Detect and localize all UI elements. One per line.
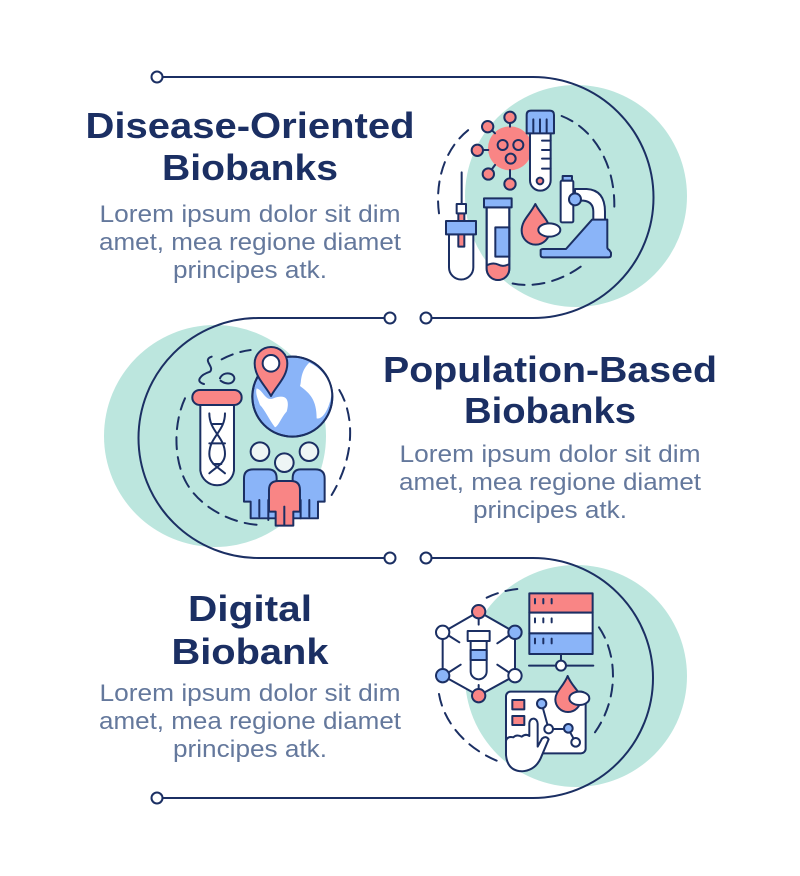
connector bottom dot 2 <box>384 552 396 564</box>
icon: population and genetics <box>192 347 332 526</box>
body text 1: amet, mea regione diamet <box>99 229 401 256</box>
icon: dashed ring 1 <box>438 116 614 285</box>
body text 3: principes atk. <box>173 736 327 763</box>
icon: dashed ring 3 <box>439 589 613 761</box>
icon: server <box>529 593 593 671</box>
icon: location pin <box>255 347 287 396</box>
icon: needle tube <box>446 172 476 279</box>
connector end dot 1 <box>420 312 432 324</box>
body text 2: amet, mea regione diamet <box>399 469 701 496</box>
icon: virus <box>472 112 532 190</box>
heading: disease-oriented biobanks: Biobanks <box>162 147 338 188</box>
connector line 2 <box>138 318 384 558</box>
icon: digital data <box>436 593 593 771</box>
icon: touch card <box>506 676 589 753</box>
panel: digital biobank <box>99 552 687 804</box>
body text 3 <box>99 680 401 763</box>
heading: disease-oriented biobanks <box>86 105 414 188</box>
body text 2 <box>399 441 701 524</box>
heading: digital biobank: Biobank <box>172 631 330 672</box>
icon: microscope <box>541 176 611 257</box>
heading: digital biobank: Digital <box>188 588 312 629</box>
mint circle 3 <box>465 565 687 787</box>
body text 3: Lorem ipsum dolor sit dim <box>100 680 400 707</box>
body text 1: principes atk. <box>173 257 327 284</box>
connector line 1 <box>163 77 654 318</box>
heading: disease-oriented biobanks: Disease-Oriented <box>86 105 414 146</box>
icon: globe <box>252 357 332 437</box>
body text 1 <box>99 201 401 284</box>
body text 2: principes atk. <box>473 497 627 524</box>
icon: test tube <box>527 111 554 191</box>
connector end dot 3 <box>152 792 162 804</box>
connector start dot 3 <box>420 552 432 564</box>
body text 1: Lorem ipsum dolor sit dim <box>100 201 400 228</box>
body text 3: amet, mea regione diamet <box>99 708 401 735</box>
connector line 3 <box>163 558 653 798</box>
icon: laboratory samples <box>446 111 611 280</box>
body text 2: Lorem ipsum dolor sit dim <box>400 441 700 468</box>
icon: blood drop <box>522 204 560 245</box>
heading: digital biobank <box>172 588 330 672</box>
panel: population-based biobanks <box>104 312 717 564</box>
icon: blood vial <box>484 198 512 280</box>
icon: dna test tube <box>192 357 242 485</box>
panel: disease-oriented biobanks <box>86 72 687 324</box>
connector top dot 2 <box>384 312 396 324</box>
icon: hexagon network <box>436 605 522 702</box>
mint circle 2 <box>104 325 326 547</box>
icon: dashed ring 2 <box>176 350 350 525</box>
icon: hand <box>506 719 549 771</box>
icon: people <box>244 442 325 526</box>
mint circle 1 <box>465 85 687 307</box>
connector start dot 1 <box>152 72 162 82</box>
heading: population-based biobanks: Biobanks <box>464 390 636 431</box>
heading: population-based biobanks: Population-Based <box>383 349 717 390</box>
heading: population-based biobanks <box>383 349 717 431</box>
